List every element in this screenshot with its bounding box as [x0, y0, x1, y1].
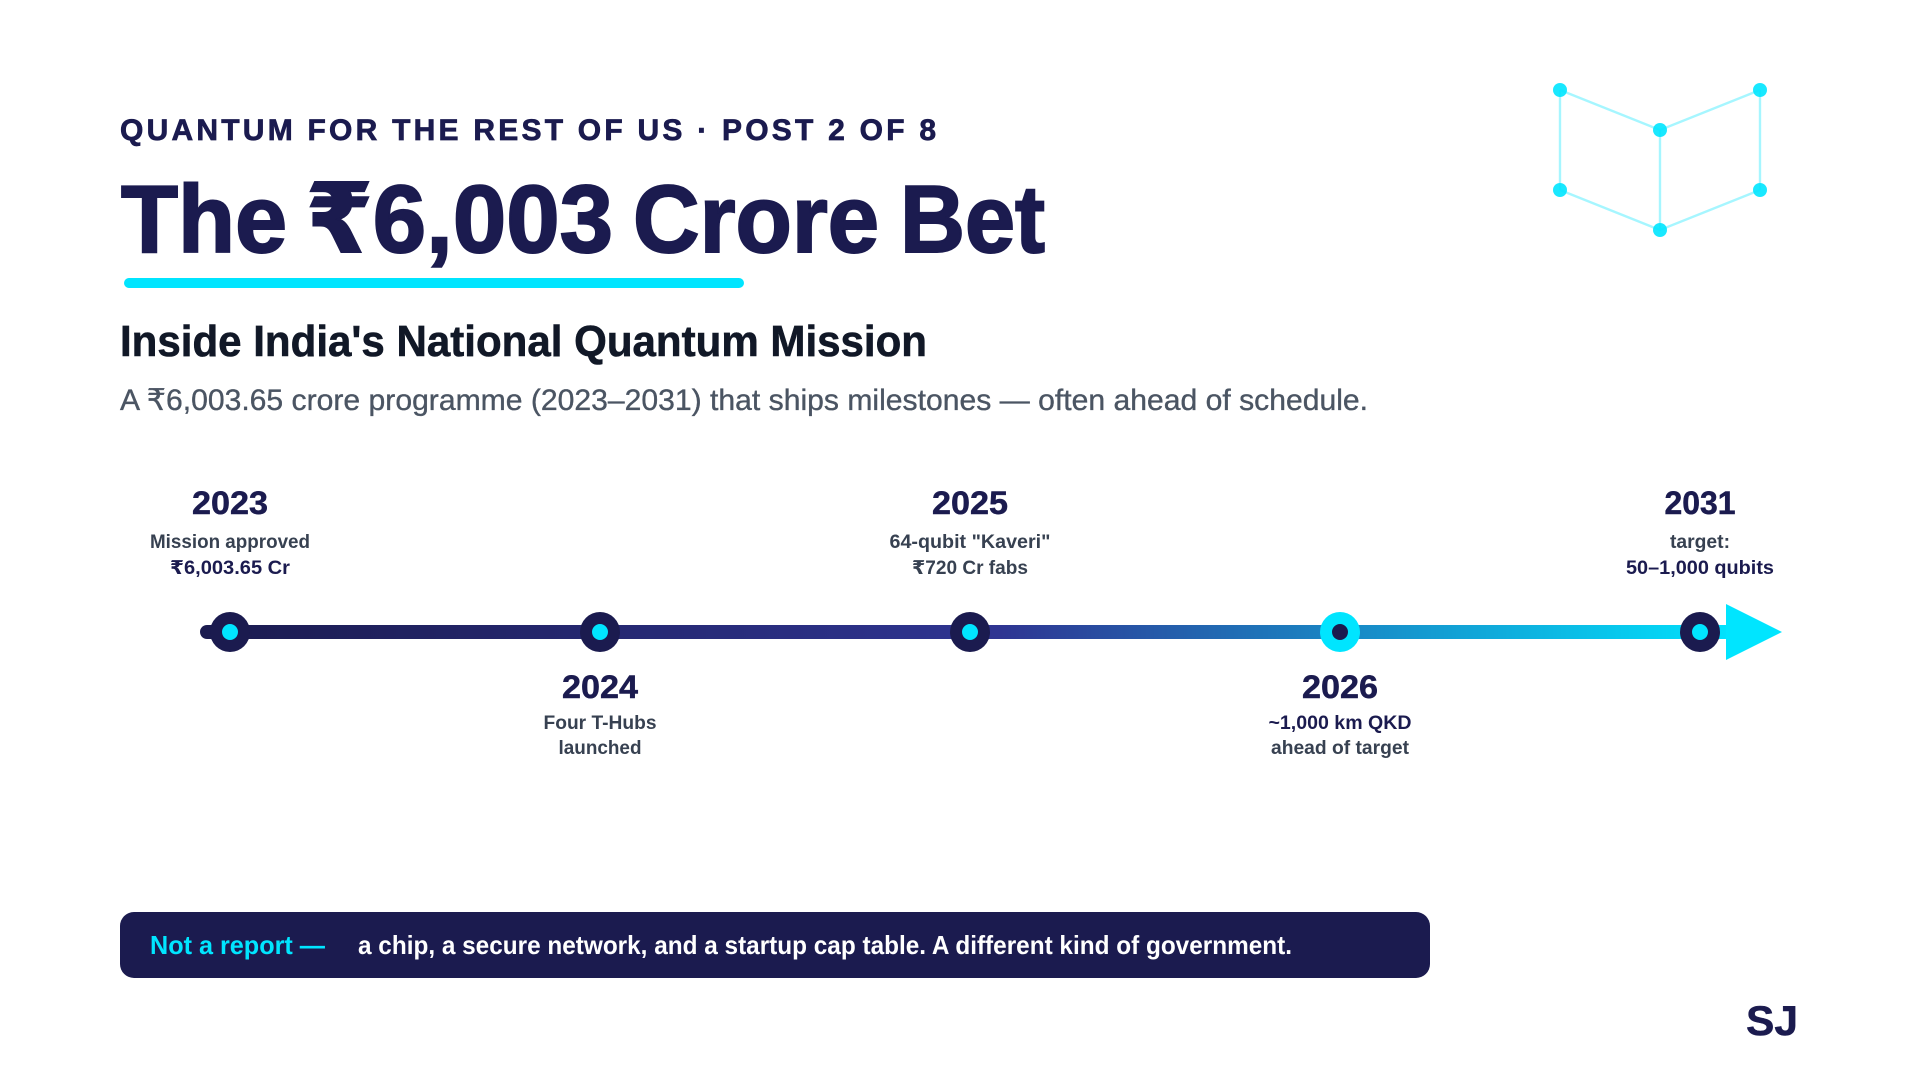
- title: The: [121, 166, 287, 273]
- milestone 2023: [150, 485, 310, 579]
- milestone 2023: Mission approved: [150, 532, 310, 553]
- eyebrow: QUANTUM FOR THE REST OF US · POST 2 OF 8: [120, 114, 936, 147]
- milestone 2026: [1268, 669, 1412, 759]
- milestone 2025: 64-qubit "Kaveri": [890, 532, 1050, 553]
- milestone 2031: [1626, 485, 1774, 579]
- milestone 2025: ₹720 Cr fabs: [912, 558, 1028, 579]
- milestone 2031: 50–1,000 qubits: [1626, 558, 1774, 579]
- logo: SJ: SJ: [1746, 997, 1798, 1044]
- description: A ₹6,003.65 crore programme (2023–2031) that ships milestones — often ahead of schedule.: [120, 384, 1368, 417]
- title: Bet: [900, 166, 1045, 273]
- milestone 2024: 2024: [562, 669, 638, 705]
- milestone 2026: ahead of target: [1271, 738, 1410, 759]
- milestone 2023: 2023: [192, 485, 268, 521]
- node 2024: [580, 612, 620, 652]
- node 2023: [210, 612, 250, 652]
- milestone 2031: target:: [1670, 532, 1730, 553]
- milestone 2031: 2031: [1664, 485, 1736, 521]
- milestone 2024: [544, 669, 656, 759]
- callout lead: Not a report —: [150, 930, 325, 960]
- title: ₹6,003: [306, 166, 613, 273]
- milestone 2026: ~1,000 km QKD: [1268, 713, 1412, 734]
- node 2025: [950, 612, 990, 652]
- milestone 2023: ₹6,003.65 Cr: [170, 558, 291, 579]
- subtitle: Inside India's National Quantum Mission: [120, 317, 927, 366]
- callout body: a chip, a secure network, and a startup cap table. A different kind of government.: [358, 930, 1292, 960]
- node 2026 highlighted: [1320, 612, 1360, 652]
- milestone 2025: [890, 485, 1050, 579]
- title: [121, 166, 1045, 273]
- timeline: [200, 604, 1782, 660]
- milestone 2025: 2025: [932, 485, 1008, 521]
- title underline: [124, 278, 744, 288]
- milestone 2024: launched: [558, 738, 642, 759]
- icon: qubit network: [1553, 83, 1767, 237]
- milestone 2026: 2026: [1302, 669, 1378, 705]
- timeline bar: [200, 625, 1740, 639]
- milestone 2024: Four T-Hubs: [544, 713, 656, 734]
- arrow head: [1726, 604, 1782, 660]
- title: Crore: [633, 166, 879, 273]
- node 2031: [1680, 612, 1720, 652]
- callout banner: [120, 912, 1430, 978]
